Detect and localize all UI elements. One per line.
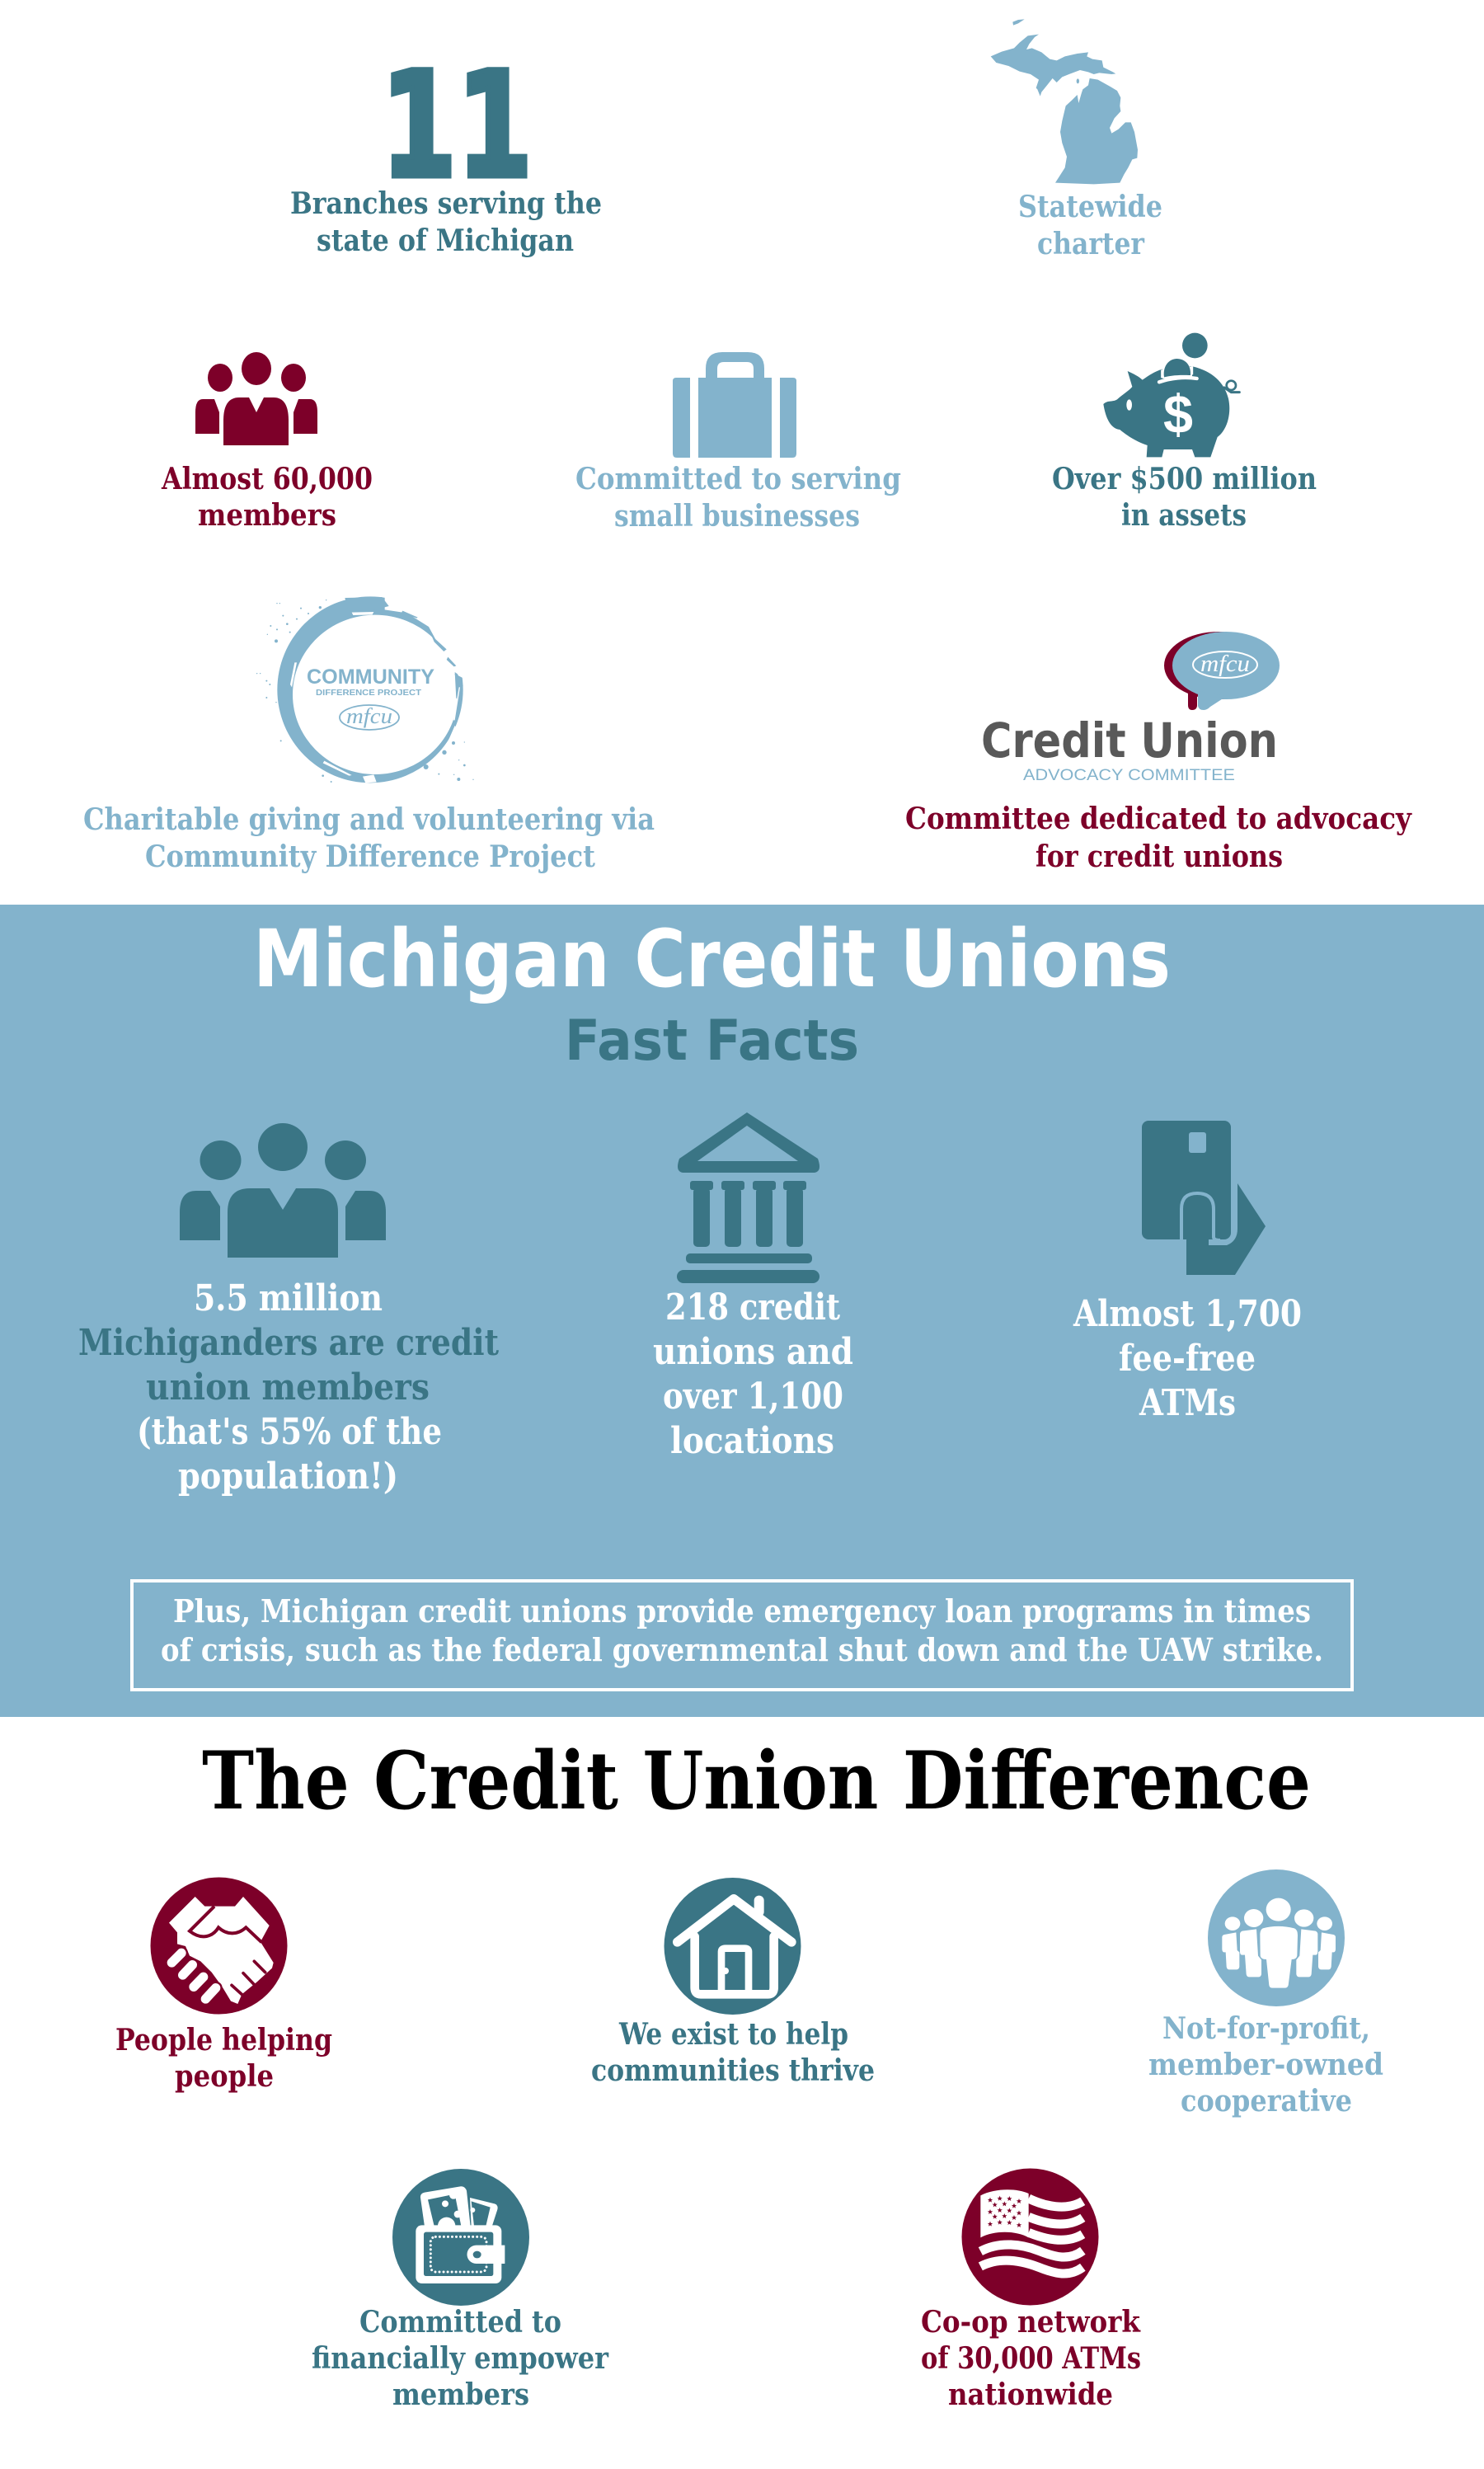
charter caption: charter [1037,227,1145,261]
heading: Michigan Credit Unions [253,913,1171,1005]
fact: credit union members [78,1123,500,1498]
callout: emergency loan programs: of crisis, such as the federal governmental shut down and the UAW strike. [161,1631,1323,1668]
advocacy caption: Committee dedicated to advocacy [905,802,1412,836]
item: co-op ATM network [921,2169,1141,2412]
callout: emergency loan programs: Plus, Michigan credit unions provide emergency loan programs in times [173,1592,1311,1630]
ATM fact text: fee-free [1119,1338,1256,1380]
charter caption [1018,190,1162,261]
locations fact text: over 1,100 [663,1376,843,1418]
small business caption: small businesses [614,499,860,534]
caption: Committed to [359,2305,561,2340]
icon: group of people [180,1123,386,1258]
icon: Michigan map [991,19,1138,184]
ATM fact text: Almost 1,700 [1073,1293,1302,1335]
callout: emergency loan programs [132,1581,1352,1690]
logo: credit union advocacy committee: mfcu [1200,651,1250,677]
fact: credit unions and locations [653,1112,853,1462]
item: communities thrive [591,1878,875,2088]
community caption: Charitable giving and volunteering via [83,802,655,837]
logo: credit union advocacy committee [981,632,1280,784]
subheading: Fast Facts [565,1009,859,1074]
stat: small businesses [575,352,901,534]
caption [312,2305,609,2412]
caption: Co-op network [921,2305,1141,2340]
locations fact text: locations [670,1420,834,1462]
members fact text: union members [146,1366,430,1409]
icon: group of members [1208,1869,1345,2006]
icon: house [665,1878,801,2015]
members fact text: population!) [178,1456,398,1498]
community caption: Community Difference Project [145,839,595,874]
community caption [83,802,655,874]
members caption: members [198,498,336,533]
panel background [0,905,1484,1717]
caption: communities thrive [591,2053,875,2088]
item: financially empower members [312,2169,609,2412]
stat: community difference project [83,592,655,874]
caption [921,2305,1141,2412]
assets caption [1052,462,1317,533]
caption: financially empower [312,2341,609,2376]
stat: members [161,352,373,533]
caption: Not-for-profit, [1162,2011,1370,2046]
caption [591,2017,875,2088]
assets caption: in assets [1121,498,1247,533]
stat: statewide charter [991,19,1162,261]
icon: piggy bank: $ [1163,383,1193,444]
caption: member-owned [1148,2048,1383,2082]
small business caption [575,462,901,534]
branches caption: Branches serving the [290,186,602,221]
members caption: Almost 60,000 [161,462,373,496]
icon: wallet [392,2169,529,2306]
small business caption: Committed to serving [575,462,901,496]
caption: nationwide [948,2377,1113,2412]
icon: community difference logo: COMMUNITY [307,665,434,689]
stat: advocacy committee [905,632,1412,874]
charter caption: Statewide [1018,190,1162,224]
icon: group of people [195,352,317,445]
advocacy caption: for credit unions [1036,839,1283,874]
panel: Michigan credit unions fast facts [0,905,1484,1717]
caption: cooperative [1181,2084,1352,2119]
members fact text: (that's 55% of the [137,1411,442,1453]
icon: community difference logo: DIFFERENCE PROJECT [316,688,422,698]
icon: briefcase [673,352,796,458]
icon: piggy bank [1103,333,1239,457]
ATM fact text [1073,1293,1302,1424]
members fact text [78,1277,500,1498]
members fact text: Michiganders are credit [78,1322,500,1364]
fact: fee-free ATMs [1073,1121,1302,1424]
caption [115,2023,332,2094]
icon: bank building [677,1112,819,1283]
stat: 11 branches [290,41,602,258]
icon: handshake [150,1877,287,2014]
icon: community difference logo [256,592,478,783]
locations fact text [653,1286,853,1462]
item: not-for-profit cooperative [1148,1869,1383,2119]
logo: credit union advocacy committee: ADVOCACY COMMITTEE [1023,767,1235,784]
caption: of 30,000 ATMs [921,2341,1141,2376]
icon: community difference logo: mfcu [346,704,392,728]
caption: people [175,2059,274,2094]
caption [1148,2011,1383,2119]
caption: People helping [115,2023,332,2058]
branches caption [290,186,602,258]
branches caption: state of Michigan [317,223,574,258]
caption: We exist to help [618,2017,848,2052]
members fact text: 5.5 million [194,1277,383,1319]
ATM fact text: ATMs [1139,1382,1236,1424]
locations fact text: 218 credit [665,1286,841,1329]
locations fact text: unions and [653,1331,853,1373]
advocacy caption [905,802,1412,874]
icon: hand inserting card [1142,1121,1266,1275]
heading: the credit union difference: The Credit Union Difference [202,1734,1311,1827]
big number 11: 11 [381,41,533,210]
assets caption: Over $500 million [1052,462,1317,496]
caption: members [392,2377,529,2412]
icon: American flag [961,2169,1098,2306]
item: people helping people [115,1877,332,2094]
stat: assets [1052,333,1317,533]
logo: credit union advocacy committee: Credit Union [981,712,1278,769]
members caption [161,462,373,533]
